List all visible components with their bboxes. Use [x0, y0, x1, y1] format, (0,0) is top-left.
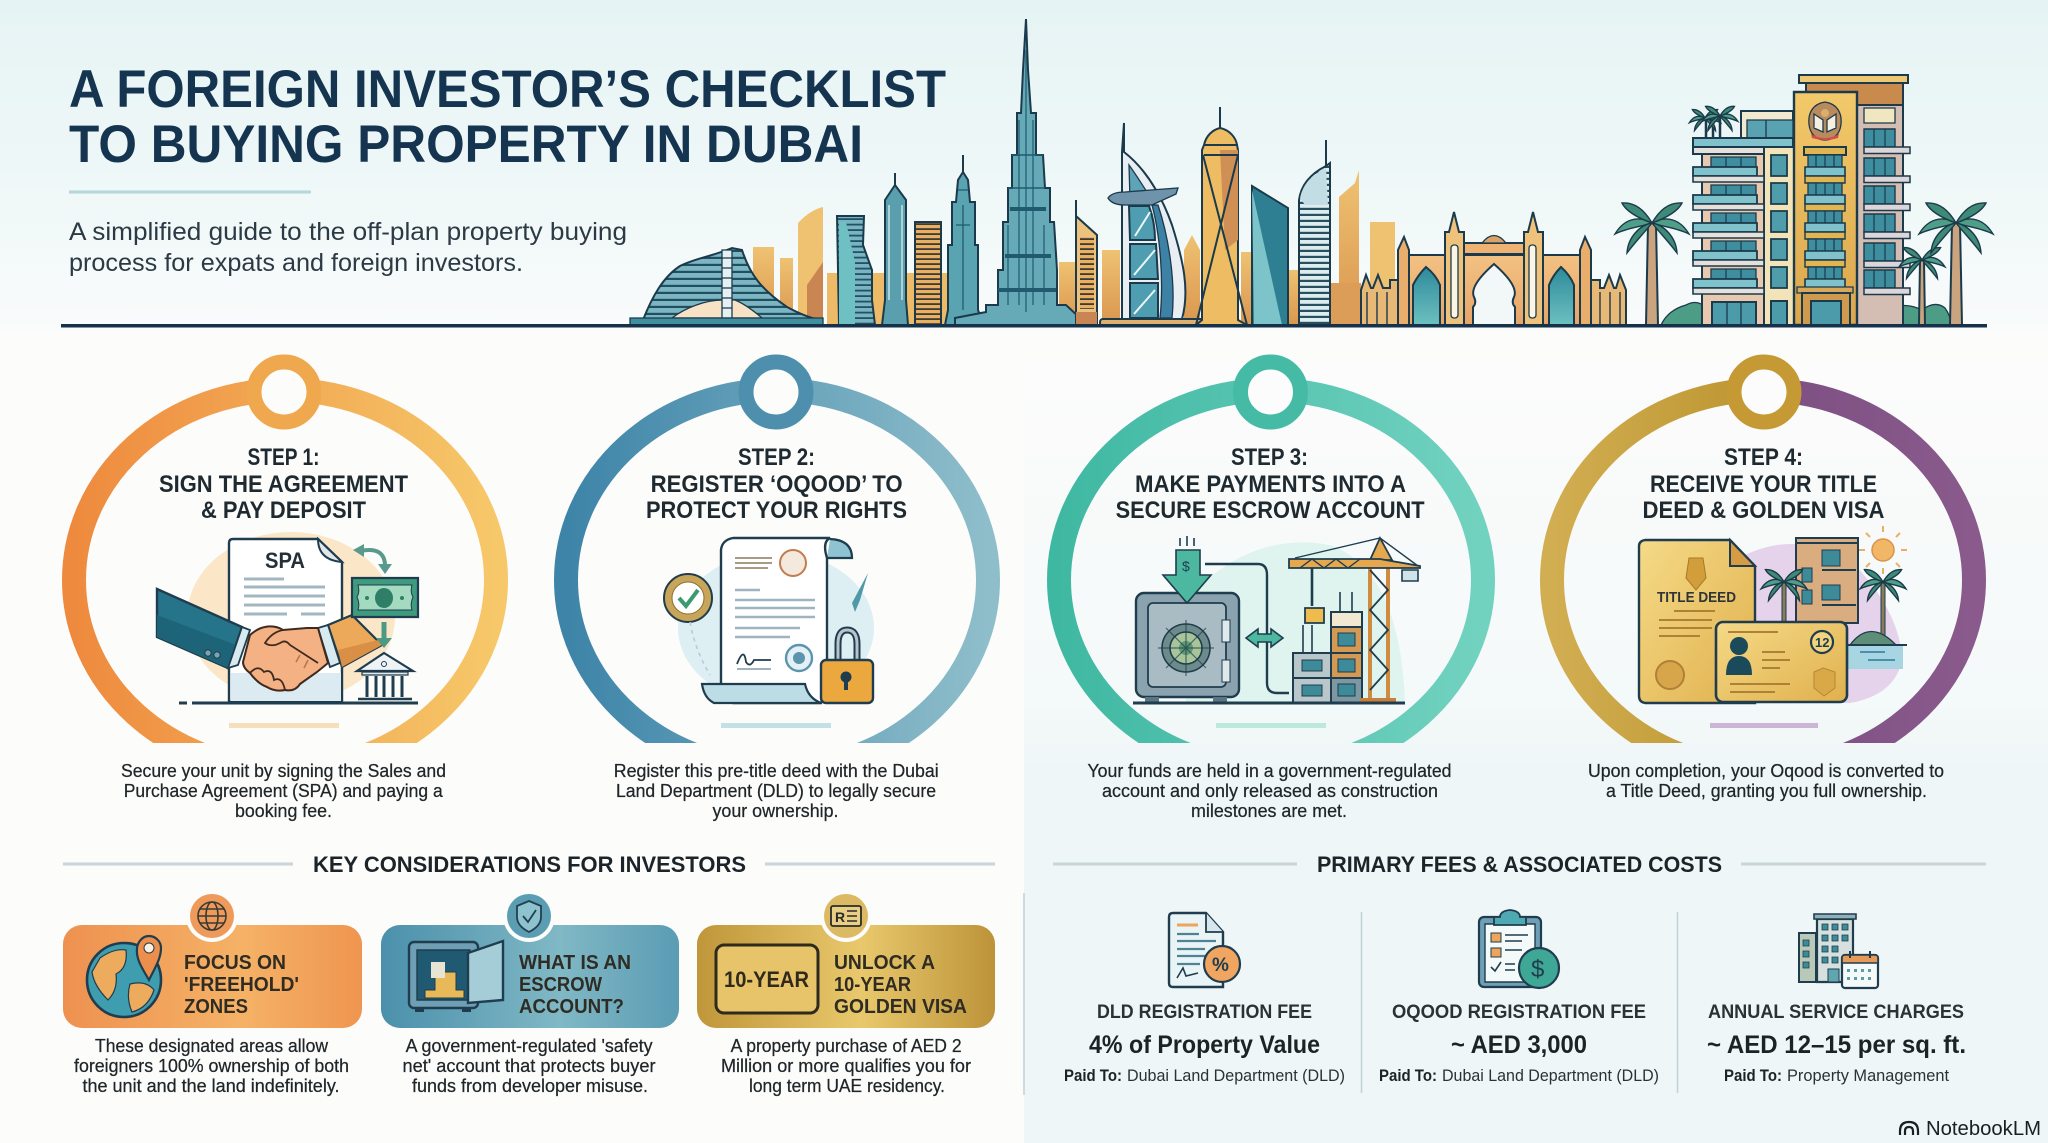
- fee: Oqood registration: ~ AED 3,000: [1451, 1031, 1587, 1059]
- spire tower: [882, 173, 908, 325]
- label: golden visa: UNLOCK A: [834, 952, 935, 974]
- heading: step 2: [646, 444, 907, 524]
- fee: Oqood registration: [1379, 910, 1659, 1085]
- icon: clipboard with dollar: $: [1531, 956, 1544, 983]
- Jumeirah sail hotel: [630, 248, 823, 325]
- label: freehold: FOCUS ON: [184, 952, 286, 974]
- heading: step 2: STEP 2:: [738, 444, 815, 471]
- heading: step 4: RECEIVE YOUR TITLE: [1650, 471, 1877, 498]
- icon: safe and crane: $: [1182, 558, 1190, 574]
- icon: clipboard with dollar: [1479, 910, 1559, 988]
- illustration: Dubai skyline: [61, 19, 1993, 328]
- description: step 3: Your funds are held in a government-regulated: [1088, 760, 1452, 781]
- subtitle: process for expats and foreign investors.: [69, 249, 523, 277]
- subtitle: [69, 218, 627, 277]
- heading: step 1: SIGN THE AGREEMENT: [159, 471, 408, 498]
- panel: step 4: [1552, 362, 1974, 801]
- icon: globe with pin: [87, 936, 161, 1017]
- icon: title deed and golden visa: 12: [1815, 635, 1829, 650]
- panel: step 2: [566, 362, 988, 821]
- heading: step 2: PROTECT YOUR RIGHTS: [646, 497, 907, 524]
- icon: ID card: [831, 906, 861, 926]
- icon: buildings with calendar: [1799, 914, 1878, 988]
- heading: key considerations: KEY CONSIDERATIONS FOR INVESTORS: [313, 852, 746, 877]
- fee: DLD registration: 4% of Property Value: [1089, 1031, 1320, 1059]
- ring: step 2: [566, 362, 988, 770]
- fee: annual service charges: Paid To:: [1724, 1066, 1782, 1085]
- heading: step 3: MAKE PAYMENTS INTO A: [1135, 471, 1406, 498]
- background orange towers: [753, 170, 1395, 325]
- description: golden visa: long term UAE residency.: [749, 1075, 945, 1096]
- heading: step 1: [159, 444, 408, 524]
- description: step 1: [121, 760, 446, 821]
- description: escrow: funds from developer misuse.: [412, 1075, 648, 1096]
- striped small tower: [1076, 200, 1097, 325]
- gold tower: [1196, 107, 1247, 325]
- icon: shield: [517, 901, 541, 932]
- badge: 10-year: [716, 945, 818, 1013]
- skyline ground line: [61, 324, 1987, 328]
- white striped tower: [1299, 140, 1330, 325]
- description: step 4: [1588, 760, 1944, 801]
- label: freehold: ZONES: [184, 996, 248, 1018]
- ring: step 3: [1059, 362, 1483, 770]
- icon: Oqood scroll and padlock: [664, 538, 874, 704]
- title: A FOREIGN INVESTOR’S CHECKLIST: [69, 60, 946, 119]
- fee: annual service charges: ~ AED 12–15 per sq. ft.: [1707, 1031, 1966, 1059]
- fee: DLD registration: Paid To:: [1064, 1066, 1122, 1085]
- fee: Oqood registration: OQOOD REGISTRATION FEE: [1392, 1002, 1646, 1023]
- panel: step 1: [74, 362, 496, 821]
- emblem on tower: [1809, 102, 1841, 140]
- icon: safe and crane: [1133, 536, 1420, 703]
- description: golden visa: A property purchase of AED 2: [731, 1035, 962, 1056]
- description: step 4: Upon completion, your Oqood is converted to: [1588, 760, 1944, 781]
- heading: primary fees: PRIMARY FEES & ASSOCIATED COSTS: [1317, 852, 1722, 877]
- logo: NotebookLM: NotebookLM: [1926, 1118, 2041, 1140]
- label: golden visa: 10-YEAR: [834, 974, 911, 996]
- Burj Khalifa: [955, 19, 1080, 325]
- description: golden visa: Million or more qualifies you for: [721, 1055, 971, 1076]
- card: freehold zones: [63, 890, 362, 1028]
- description: freehold: [74, 1035, 349, 1096]
- description: freehold: These designated areas allow: [95, 1035, 329, 1056]
- palm: small right: [1899, 248, 1945, 325]
- heading: step 2: REGISTER ‘OQOOD’ TO: [651, 471, 903, 498]
- icon: document with percent: %: [1212, 955, 1229, 976]
- description: step 2: [614, 760, 939, 821]
- description: step 3: milestones are met.: [1191, 800, 1347, 821]
- label: escrow: ESCROW: [519, 974, 602, 996]
- description: step 1: booking fee.: [235, 800, 332, 821]
- heading: step 3: [1116, 444, 1425, 524]
- heading: step 3: STEP 3:: [1231, 444, 1308, 471]
- fee: Oqood registration: Paid To:: [1379, 1066, 1437, 1085]
- fee: annual service charges: ANNUAL SERVICE CHARGES: [1708, 1002, 1964, 1023]
- residential tower: [1689, 75, 1910, 325]
- icon: globe small: [198, 902, 226, 930]
- description: escrow: [402, 1035, 656, 1096]
- heading: step 1: STEP 1:: [248, 444, 320, 471]
- label: golden visa: [834, 952, 967, 1018]
- ring: step 1: [74, 362, 496, 770]
- heading: primary fees: [1053, 852, 1986, 877]
- description: freehold: foreigners 100% ownership of both: [74, 1055, 349, 1076]
- orange striped tower: [915, 222, 941, 325]
- icon: agreement handshake: [157, 532, 418, 703]
- heading: step 4: [1642, 444, 1884, 524]
- fee: DLD registration: [1064, 913, 1345, 1085]
- label: golden visa: GOLDEN VISA: [834, 996, 967, 1018]
- icon: open safe: [409, 941, 503, 1012]
- description: step 2: your ownership.: [712, 800, 838, 821]
- description: step 3: account and only released as construction: [1102, 780, 1438, 801]
- ring: step 4: [1552, 362, 1974, 770]
- panel: step 3: [1059, 362, 1483, 821]
- card: golden visa: [697, 890, 995, 1028]
- label: freehold: 'FREEHOLD': [184, 974, 299, 996]
- Atlantis: [1361, 212, 1626, 325]
- fee: annual service charges: Property Management: [1787, 1066, 1949, 1085]
- palm: large right: [1919, 203, 1993, 325]
- icon: agreement handshake: SPA: [265, 548, 305, 573]
- subtitle: A simplified guide to the off-plan property buying: [69, 218, 627, 246]
- label: escrow: ACCOUNT?: [519, 996, 624, 1018]
- label: escrow: WHAT IS AN: [519, 952, 631, 974]
- description: escrow: A government-regulated 'safety: [406, 1035, 653, 1056]
- title: TO BUYING PROPERTY IN DUBAI: [69, 115, 863, 174]
- description: step 3: [1088, 760, 1452, 821]
- label: escrow: [519, 952, 631, 1018]
- heading: step 1: & PAY DEPOSIT: [201, 497, 366, 524]
- label: freehold: [184, 952, 299, 1018]
- heading: step 3: SECURE ESCROW ACCOUNT: [1116, 497, 1425, 524]
- twin-set tower: [945, 155, 984, 325]
- twisted tower: [837, 216, 875, 325]
- description: escrow: net' account that protects buyer: [402, 1055, 656, 1076]
- icon: title deed and golden visa: [1639, 526, 1907, 703]
- fee: DLD registration: DLD REGISTRATION FEE: [1097, 1002, 1312, 1023]
- fee: Oqood registration: Dubai Land Department (DLD): [1442, 1066, 1659, 1085]
- description: step 2: Land Department (DLD) to legally secure: [616, 780, 936, 801]
- fee: annual service charges: [1707, 914, 1966, 1085]
- description: golden visa: [721, 1035, 971, 1096]
- card: escrow account: [381, 890, 679, 1028]
- heading: key considerations: [63, 852, 995, 877]
- Burj Al Arab: [1100, 123, 1206, 326]
- icon: title deed and golden visa: TITLE DEED: [1657, 589, 1736, 606]
- bushes: [1661, 302, 1952, 325]
- teal tower: [1252, 186, 1288, 325]
- fee: DLD registration: Dubai Land Department (DLD): [1127, 1066, 1345, 1085]
- badge: 10-year: 10-YEAR: [724, 967, 809, 992]
- icon: document with percent: [1169, 913, 1240, 987]
- description: step 1: Secure your unit by signing the Sales and: [121, 760, 446, 781]
- description: step 1: Purchase Agreement (SPA) and paying a: [124, 780, 443, 801]
- icon: ID card: R: [835, 909, 845, 925]
- description: freehold: the unit and the land indefinitely.: [82, 1075, 340, 1096]
- heading: step 4: DEED & GOLDEN VISA: [1642, 497, 1884, 524]
- title: [69, 60, 946, 174]
- description: step 4: a Title Deed, granting you full ownership.: [1606, 780, 1927, 801]
- palm: left: [1615, 203, 1689, 325]
- heading: step 4: STEP 4:: [1724, 444, 1803, 471]
- description: step 2: Register this pre-title deed with the Dubai: [614, 760, 939, 781]
